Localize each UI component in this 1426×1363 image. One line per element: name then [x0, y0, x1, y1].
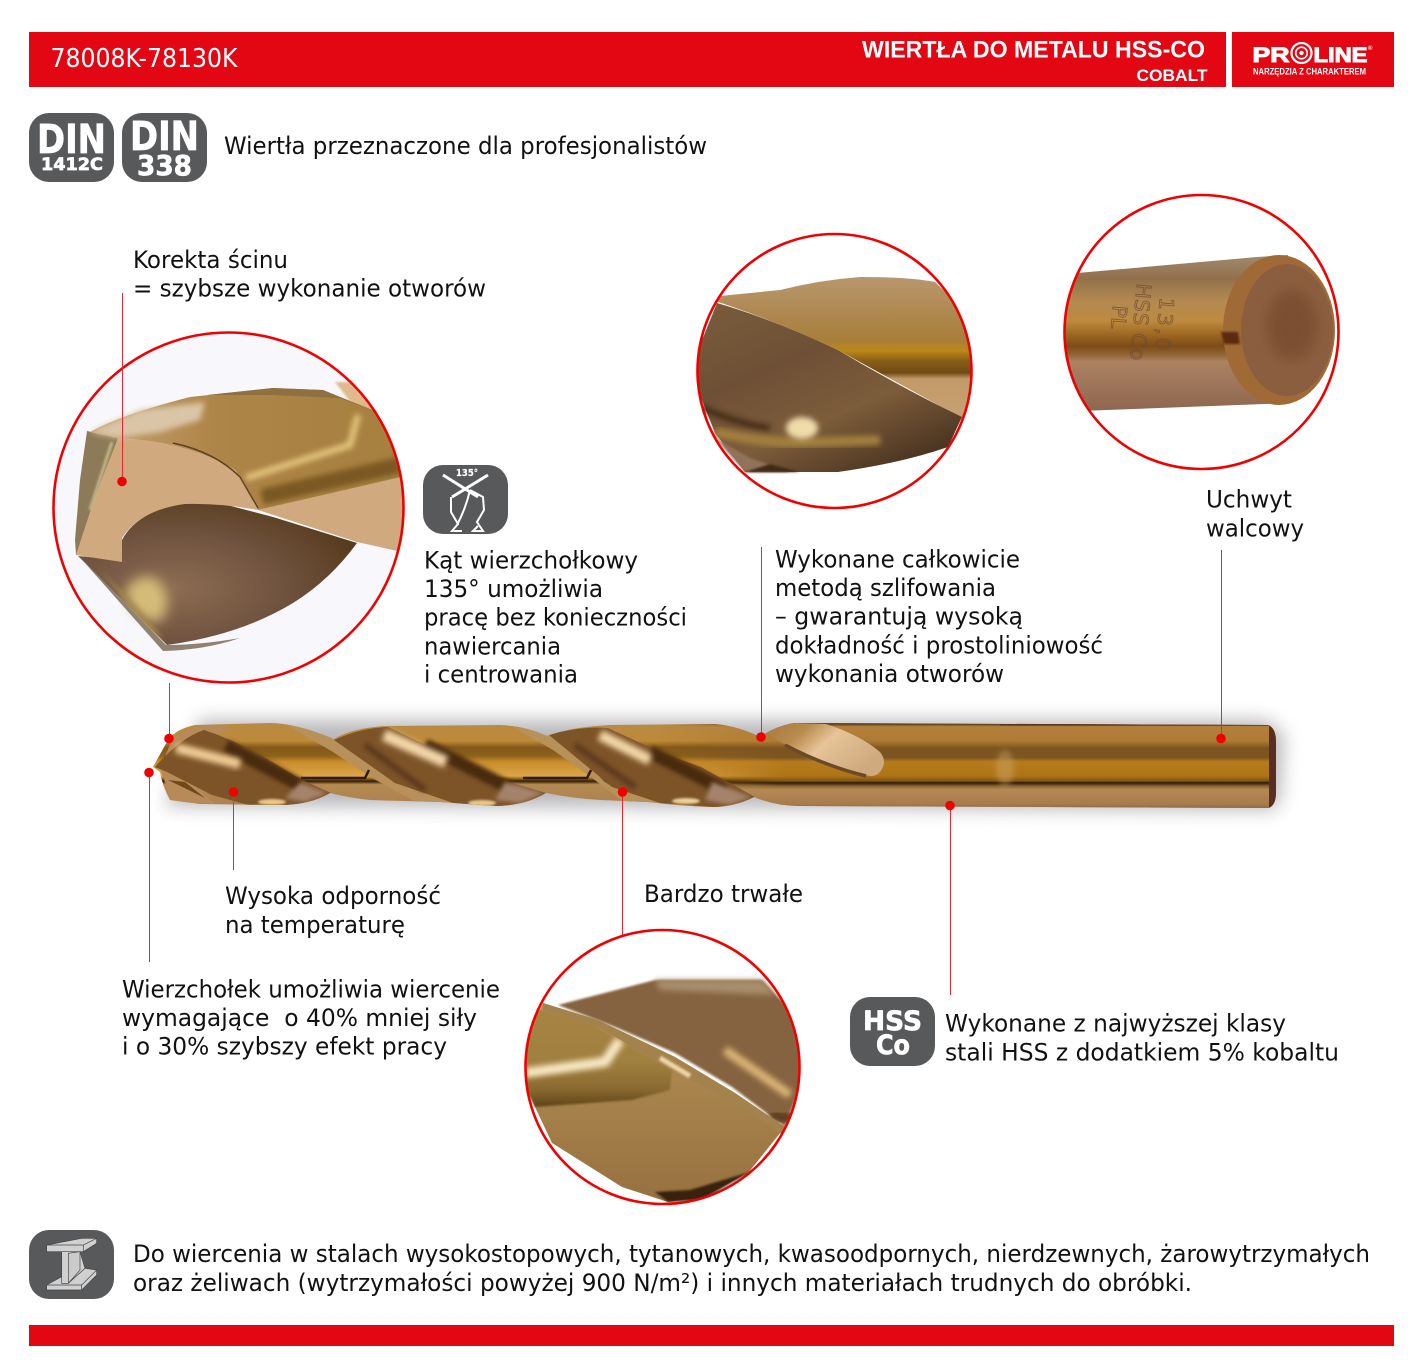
callout: ground flutes: Wykonane całkowicie: [775, 546, 1020, 574]
flute 1: [155, 730, 331, 806]
icon: 135 degree point angle: [423, 465, 508, 534]
callout: ground flutes: – gwarantują wysoką: [775, 602, 1023, 630]
callout: ground flutes: wykonania otworów: [775, 660, 1004, 688]
badge: DIN 338: DIN: [130, 114, 199, 160]
callout: HSS cobalt steel: stali HSS z dodatkiem 5% kobaltu: [945, 1038, 1339, 1066]
icon: 135 degree point angle: 135°: [456, 468, 478, 479]
product subtitle: COBALT: [1136, 66, 1208, 85]
photo circle: shank end: 13,0: [1150, 297, 1179, 351]
shadow: [165, 720, 1284, 810]
dark band: [262, 465, 400, 497]
flute 2: [334, 727, 546, 806]
photo circle: durable edge: [515, 930, 800, 1204]
callout: point angle 135: i centrowania: [424, 660, 578, 688]
callout lines and markers: [117, 293, 1226, 995]
callout: point angle 135: 135° umożliwia: [424, 575, 603, 603]
product code range: 78008K-78130K: [50, 44, 238, 74]
drill bit: [150, 720, 1284, 810]
callout: ground flutes: [775, 546, 1103, 688]
flute: [78, 503, 357, 645]
callout: tip benefits: wymagające o 40% mniej siły: [122, 1004, 477, 1032]
highlight: [246, 415, 358, 478]
badge: HSS Co: [850, 997, 935, 1066]
rims: [285, 724, 456, 803]
logo: Proline: ®: [1368, 45, 1373, 52]
logo: Proline: [1232, 32, 1394, 87]
logo: Proline: LINE: [1314, 44, 1368, 67]
callout: ground flutes: metodą szlifowania: [775, 574, 996, 602]
land: [76, 438, 258, 562]
logo: Proline: NARZĘDZIA Z CHARAKTEREM: [1253, 66, 1366, 76]
callout: very durable: Bardzo trwałe: [644, 880, 803, 908]
callout: Korekta scinu: [133, 246, 486, 302]
top body: [90, 388, 405, 510]
cone: [75, 431, 118, 555]
logo: Proline: PR: [1252, 44, 1290, 67]
footer bar: [29, 1325, 1394, 1346]
lower land: [258, 476, 405, 552]
dark streaks: [226, 745, 725, 790]
callout: cylindrical shank: walcowy: [1206, 514, 1304, 542]
badge: DIN 1412C: [29, 113, 114, 182]
highlights: [176, 748, 240, 764]
header bar: [29, 32, 1226, 87]
callout: HSS cobalt steel: Wykonane z najwyższej klasy: [945, 1010, 1286, 1038]
callout: cylindrical shank: [1206, 486, 1304, 542]
callout: tip benefits: Wierzchołek umożliwia wiercenie: [122, 976, 500, 1004]
flute 3: [549, 728, 755, 807]
badge: DIN 338: 338: [137, 149, 192, 182]
photo circle: flute detail: [690, 234, 975, 508]
photo circle: shank end: [1055, 195, 1338, 469]
photo circle: drill tip: [54, 332, 405, 682]
callout: tip benefits: [122, 976, 500, 1060]
callout: point angle 135: [424, 546, 687, 688]
callout: cylindrical shank: Uchwyt: [1206, 486, 1292, 514]
callout: point angle 135: pracę bez konieczności: [424, 604, 687, 632]
callout: HSS cobalt steel: [945, 1010, 1339, 1066]
badge: DIN 1412C: 1412C: [41, 155, 103, 175]
badge: HSS Co: Co: [876, 1030, 910, 1061]
applications text: oraz żeliwach (wytrzymałości powyżej 900 N/m²) i innych materiałach trudnych do obróbki.: [133, 1269, 1192, 1297]
end cap: [1269, 726, 1276, 808]
callout: heat resistance: [225, 882, 441, 939]
badge: HSS Co: HSS: [863, 1006, 922, 1037]
light lower ends: [285, 782, 752, 805]
callout: heat resistance: Wysoka odporność: [225, 882, 441, 910]
tip land: [160, 726, 230, 804]
badge: DIN 1412C: DIN: [37, 117, 106, 163]
photo circle: shank end: PL: [1106, 305, 1132, 331]
callout: ground flutes: dokładność i prostoliniowość: [775, 632, 1103, 660]
callout: tip benefits: i o 30% szybszy efekt pracy: [122, 1032, 447, 1060]
callout: point angle 135: nawiercania: [424, 632, 561, 660]
callout: Korekta scinu: = szybsze wykonanie otworów: [133, 274, 486, 302]
badge: DIN 338: [122, 113, 207, 182]
icon: steel I-beam: [29, 1230, 114, 1299]
applications text: [133, 1240, 1370, 1297]
applications text: Do wiercenia w stalach wysokostopowych, tytanowych, kwasoodpornych, nierdzewnych, żarowytrzymałych: [133, 1240, 1370, 1268]
callout: Korekta scinu: Korekta ścinu: [133, 246, 288, 274]
photo circle: shank end: HSS Co: [1125, 283, 1156, 361]
callout: heat resistance: na temperaturę: [225, 911, 405, 939]
intro text: Wiertła przeznaczone dla profesjonalistów: [224, 132, 707, 160]
product title: WIERTŁA DO METALU HSS-CO: [862, 36, 1205, 64]
callout: point angle 135: Kąt wierzchołkowy: [424, 546, 638, 574]
relief notch: [767, 723, 884, 776]
